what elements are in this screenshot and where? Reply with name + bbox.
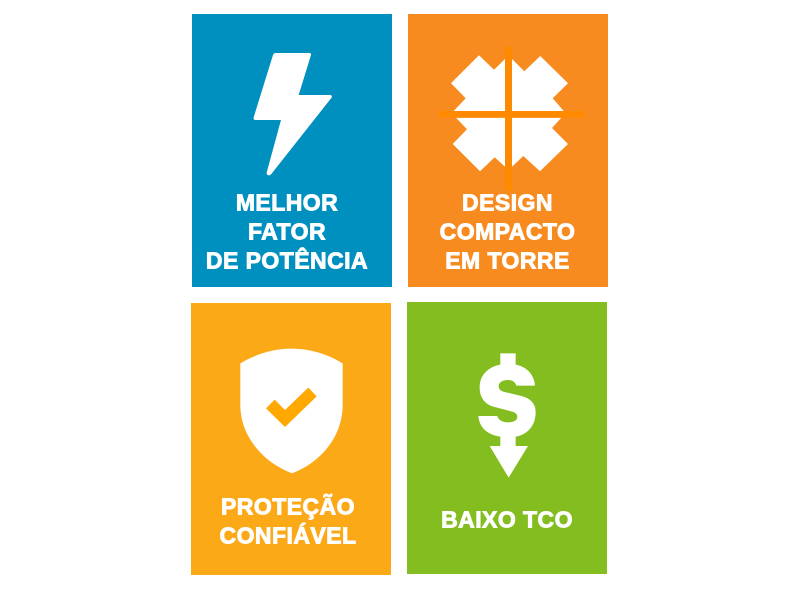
heading: proteção confiável: PROTEÇÃO	[221, 492, 355, 520]
heading: design compacto em torre: DESIGN	[462, 190, 553, 216]
icon: dollar with down arrow	[478, 353, 536, 478]
panel: baixo tco	[407, 302, 607, 574]
panel: design compacto em torre	[408, 14, 608, 287]
icon: compact tower cross	[439, 47, 585, 191]
heading: melhor fator de potência: FATOR	[248, 218, 326, 244]
panel: melhor fator de potência	[192, 14, 392, 287]
heading: melhor fator de potência: DE POTÊNCIA	[206, 246, 368, 274]
heading: baixo tco: BAIXO TCO	[441, 506, 573, 532]
icon: lightning bolt	[254, 53, 332, 175]
icon: shield with check	[240, 349, 343, 473]
heading: design compacto em torre: COMPACTO	[440, 218, 575, 244]
heading: proteção confiável: CONFIÁVEL	[220, 522, 356, 548]
panel: proteção confiável	[191, 303, 391, 575]
heading: design compacto em torre: EM TORRE	[445, 248, 570, 274]
heading: melhor fator de potência: MELHOR	[236, 190, 338, 216]
